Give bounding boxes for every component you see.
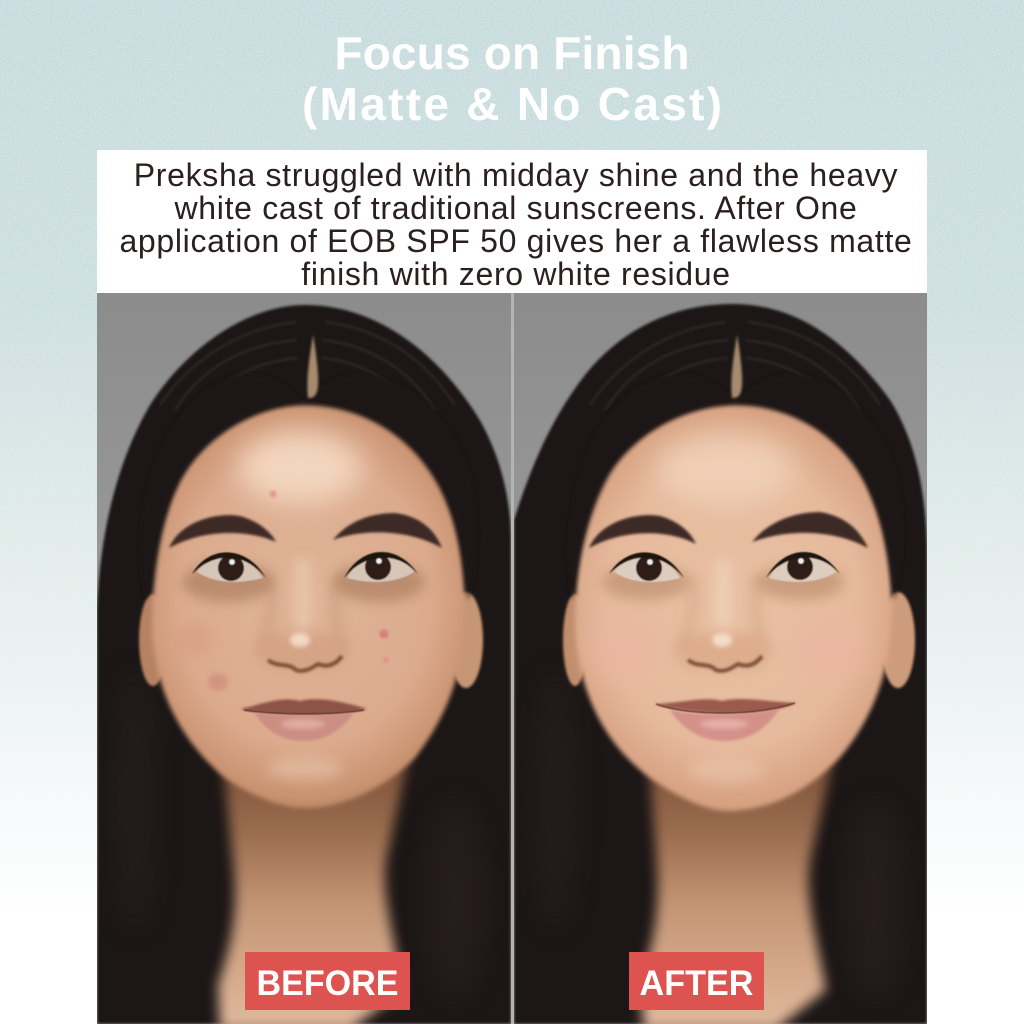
text panel: description: application of EOB SPF 50 gives her a flawless matte (119, 223, 913, 259)
text panel: description (97, 150, 927, 293)
text panel: description: finish with zero white residue (301, 256, 731, 292)
neck: after (640, 750, 835, 1024)
title: (Matte & No Cast) (302, 78, 722, 130)
label: before (245, 952, 410, 1010)
lips (240, 699, 367, 741)
nose (264, 634, 340, 669)
eyebrows (589, 515, 696, 548)
photo: before (97, 293, 511, 1024)
face: before (139, 405, 483, 808)
photo: after (514, 293, 927, 1024)
forehead highlight (655, 434, 795, 506)
eyebrows (169, 515, 276, 548)
eye sockets (182, 562, 274, 602)
background gradient (0, 0, 1024, 818)
title (302, 27, 722, 130)
forehead highlight (238, 432, 362, 504)
eyes (192, 552, 418, 582)
title: Focus on Finish (334, 27, 690, 79)
face: after (563, 405, 915, 811)
hair part: before (307, 335, 318, 398)
chin highlight (267, 756, 343, 780)
nose bridge (297, 560, 309, 630)
text panel: description: Preksha struggled with midday shine and the heavy (134, 157, 898, 193)
cheek blush (589, 620, 866, 680)
ears (563, 594, 587, 686)
eye sockets (602, 564, 690, 600)
hair: after (514, 304, 927, 1024)
label: after: AFTER (640, 964, 754, 1003)
hair part: after (731, 335, 742, 398)
label: before: BEFORE (256, 964, 398, 1003)
ears (139, 594, 167, 686)
face-framing hair: after (569, 374, 903, 600)
photo divider (511, 293, 514, 1024)
lips (655, 699, 796, 741)
nose bridge (717, 560, 729, 630)
chin highlight (692, 762, 760, 782)
text panel: description: white cast of traditional sunscreens. After One (174, 190, 857, 226)
acne marks (175, 490, 389, 691)
eyes (609, 552, 840, 582)
hair: before (97, 305, 511, 1024)
face-framing hair: before (141, 374, 477, 600)
neck: before (218, 750, 410, 1024)
label: after (629, 952, 764, 1010)
nose (677, 633, 767, 672)
